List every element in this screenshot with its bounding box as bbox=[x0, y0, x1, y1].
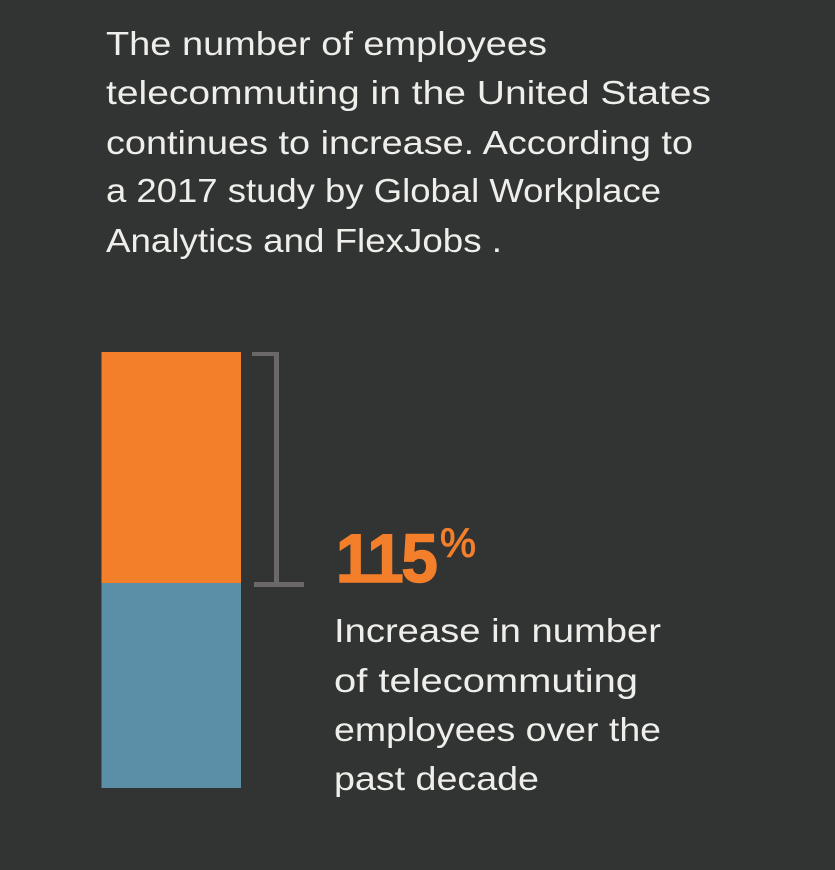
intro text block: Analytics and FlexJobs . bbox=[106, 223, 502, 260]
statistic: 115%: % bbox=[440, 520, 476, 566]
intro text block: continues to increase. According to bbox=[106, 125, 693, 162]
bar segment: base bbox=[102, 583, 241, 788]
intro text block: telecommuting in the United States bbox=[106, 75, 711, 112]
bracket marking increase bbox=[252, 352, 304, 587]
intro text block: a 2017 study by Global Workplace bbox=[106, 173, 661, 210]
statistic description: past decade bbox=[334, 761, 539, 798]
intro text block bbox=[106, 26, 711, 260]
statistic description: Increase in number bbox=[334, 613, 661, 650]
statistic description: of telecommuting bbox=[334, 663, 638, 700]
bar segment: increase bbox=[102, 352, 241, 583]
statistic description: employees over the bbox=[334, 712, 661, 749]
stacked bar chart bbox=[102, 352, 241, 788]
intro text block: The number of employees bbox=[106, 26, 547, 63]
statistic description bbox=[334, 613, 661, 798]
statistic: 115%: 115 bbox=[336, 520, 438, 597]
